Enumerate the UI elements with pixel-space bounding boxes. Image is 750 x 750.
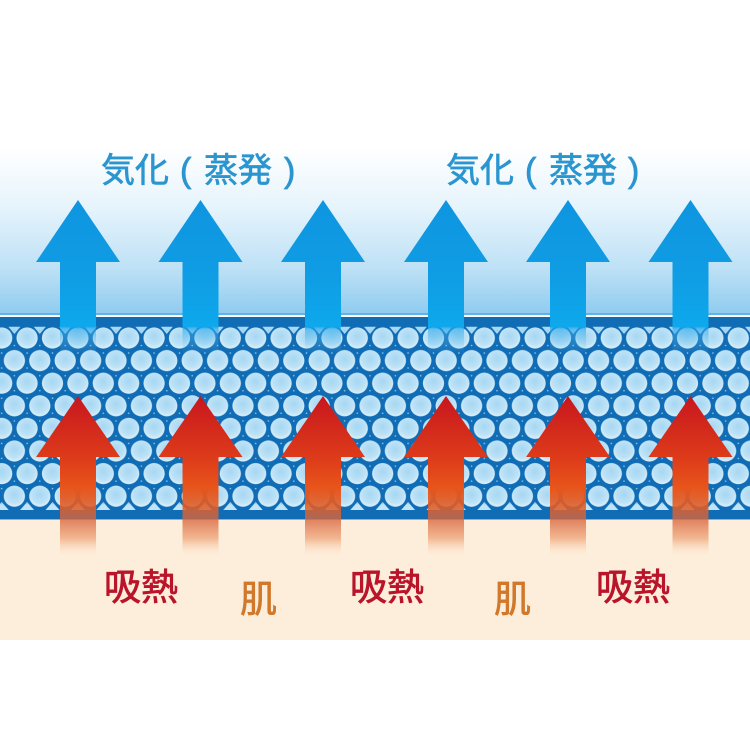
arrow: evaporation 3 (281, 200, 365, 354)
arrow: heat 6 (648, 396, 732, 558)
heading: evaporation left: ( (180, 152, 192, 190)
arrow: evaporation 2 (158, 200, 242, 354)
arrow: heat 3 (281, 396, 365, 558)
arrow: heat 5 (526, 396, 610, 558)
fabric band (0, 313, 750, 520)
heading: evaporation left: 蒸発 (204, 152, 272, 190)
blue evaporation arrows (36, 200, 732, 354)
arrow: evaporation 5 (526, 200, 610, 354)
arrow: evaporation 4 (404, 200, 488, 354)
heading: evaporation right: 気化 (446, 152, 514, 190)
red heat absorption arrows (36, 396, 732, 558)
arrow: evaporation 1 (36, 200, 120, 354)
heading: evaporation right: ( (525, 152, 537, 190)
sky gradient background (0, 148, 750, 316)
heading: evaporation right: ) (628, 152, 639, 190)
arrow: evaporation 6 (648, 200, 732, 354)
heading: evaporation left: 気化 (101, 152, 169, 190)
label: heat absorption right: 吸熱 (596, 567, 670, 608)
heading: evaporation left: ) (284, 152, 295, 190)
label: skin right: 肌 (494, 579, 531, 620)
label: heat absorption left: 吸熱 (104, 567, 178, 608)
label: skin left: 肌 (240, 579, 277, 620)
label: heat absorption middle: 吸熱 (350, 567, 424, 608)
arrow: heat 2 (158, 396, 242, 558)
arrow: heat 1 (36, 396, 120, 558)
skin layer (0, 519, 750, 640)
heading: evaporation right: 蒸発 (549, 152, 617, 190)
arrow: heat 4 (404, 396, 488, 558)
